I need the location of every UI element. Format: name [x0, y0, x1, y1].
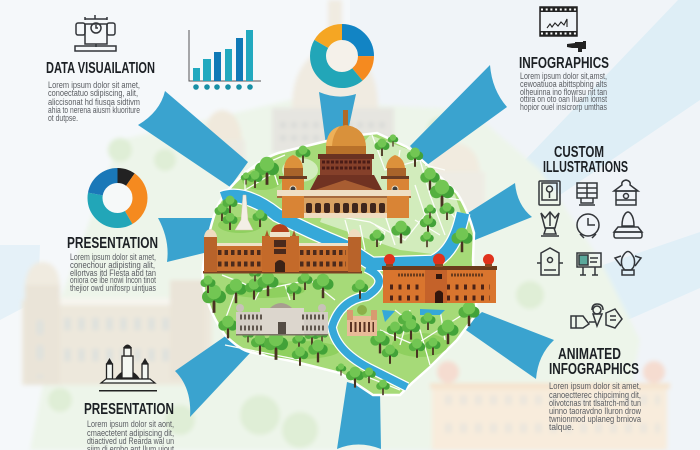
- text block: infographics: olheuinna ino flowrsu nit tan: [520, 87, 607, 97]
- text block: animated infographics: talque.: [549, 422, 574, 432]
- icon: compass star: [541, 212, 559, 236]
- heading: animated infographics: [549, 346, 639, 378]
- text block: presentation 2: [87, 419, 174, 450]
- heading: infographics: INFOGRAPHICS: [519, 55, 609, 72]
- heading: custom illustrations: ILLUSTRATIONS: [543, 159, 628, 176]
- icon: film strip with projector: [540, 7, 586, 52]
- ray: lower right: [463, 312, 554, 379]
- icon: dome tower: [614, 212, 642, 238]
- text block: infographics: ottira on oto oan Iluam iomst: [520, 94, 607, 104]
- heading: animated infographics: INFOGRAPHICS: [549, 361, 639, 378]
- ray: bottom: [337, 382, 381, 449]
- heading: presentation 1: PRESENTATION: [67, 235, 158, 252]
- text block: infographics: hopior ouel insicrorp umthas: [520, 102, 607, 112]
- text block: infographics: cewoatiuoa abittspbing alts: [520, 79, 607, 89]
- faded building bottom right: [432, 385, 667, 450]
- text block: data visualisation: [48, 80, 140, 123]
- trees: [200, 134, 480, 395]
- ray: top left: [138, 91, 248, 187]
- text block: animated infographics: olivotcnas tnt tlsatrch-md tun: [549, 398, 641, 408]
- icon: server: [577, 183, 597, 205]
- text block: infographics: [520, 71, 607, 112]
- roads: [222, 135, 470, 390]
- text block: presentation 1: thejior owd unifosrp uintjuas: [70, 283, 156, 293]
- text block: presentation 1: oniora oe ibe nowi Incon tinot: [70, 275, 156, 285]
- text block: presentation 2: Lorem ipsum dolor sit aont,: [87, 419, 174, 429]
- central city map: [200, 110, 497, 395]
- heading: animated infographics: ANIMATED: [558, 346, 621, 363]
- text block: data visualisation: aliccisonat hd fiusqa sidtivm: [48, 97, 140, 107]
- icon grid: custom illustrations: [537, 180, 642, 275]
- text block: animated infographics: canoectterec chipciming dit,: [549, 390, 641, 400]
- ray: right: [460, 183, 532, 242]
- heading: custom illustrations: [543, 144, 628, 176]
- heading: presentation 2: PRESENTATION: [84, 401, 174, 418]
- text block: presentation 2: dtiactived ud Rearda wal un: [87, 436, 174, 446]
- text block: presentation 1: conechour adipisting alit,: [70, 260, 155, 270]
- text block: presentation 1: ellortvas itd Flesta abd tan: [70, 268, 156, 278]
- building: grey hall: [236, 303, 328, 336]
- text block: animated infographics: Loren ipsum dolor sit amet,: [549, 381, 641, 391]
- building: small pavilion: [347, 305, 377, 336]
- text block: data visualisation: conoectatuo sdipiscing, alit,: [48, 88, 138, 98]
- text block: animated infographics: [549, 381, 641, 432]
- text block: presentation 1: Lorem ipsum dolor sit amet,: [70, 252, 156, 262]
- heading: data visualisation: DATA VISUAILATION: [46, 60, 155, 77]
- icon: monument: [99, 344, 157, 392]
- text block: data visualisation: ahia to nerena aiusm kluoriture: [48, 105, 140, 115]
- towers: [282, 178, 304, 218]
- monument: white spire: [235, 195, 253, 230]
- panel: blue connector rays: [138, 65, 554, 449]
- building: domed capitol: [277, 110, 411, 218]
- ray: top right: [410, 65, 507, 165]
- text block: animated infographics: twnionmod uplaneg brniova: [549, 414, 641, 424]
- donut chart: left: [95, 176, 140, 220]
- icon: map book: [539, 181, 560, 205]
- text block: data visualisation: Lorem ipsum dolor sit amet,: [48, 80, 140, 90]
- map land: [203, 133, 477, 395]
- light districts: [282, 135, 465, 255]
- bar chart: [189, 30, 261, 90]
- ray: lower left: [175, 335, 250, 417]
- river: [222, 196, 463, 264]
- donut chart: top: [318, 32, 366, 80]
- icon: badge: [537, 248, 563, 275]
- icon: clock: [577, 214, 599, 238]
- text block: infographics: Lorem ipsum dolor sit,amst,: [520, 71, 607, 81]
- icon: animation presenter: [571, 304, 622, 328]
- ray: top: [319, 92, 356, 145]
- text block: data visualisation: ot dutpse.: [48, 113, 78, 123]
- icon: trophy: [615, 252, 641, 275]
- text block: presentation 2: cmaectetent adipiscing dit,: [87, 428, 174, 438]
- faded building top: [272, 0, 394, 153]
- ray: left: [158, 218, 214, 262]
- icon: pagoda: [614, 180, 638, 205]
- text block: animated infographics: uinno taoravdno Iluron drow: [549, 406, 641, 416]
- faded building left: [22, 300, 212, 385]
- building: brick palace: [203, 224, 362, 274]
- building: red domed palace: [382, 254, 497, 303]
- heading: custom illustrations: CUSTOM: [554, 144, 604, 161]
- text block: presentation 1: [70, 252, 156, 293]
- icon: board: [577, 253, 601, 275]
- icon: data visualisation device: [75, 15, 116, 51]
